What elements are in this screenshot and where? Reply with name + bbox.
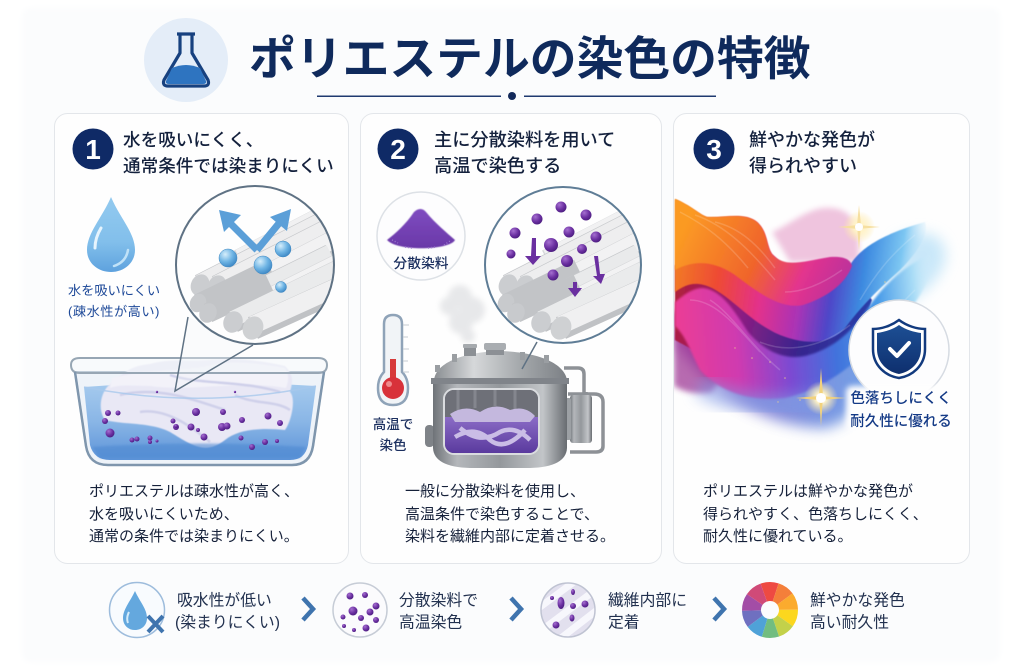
panel: card 1: [54, 114, 360, 564]
card 3 heading: 鮮やかな発色が: [749, 129, 875, 150]
flow strip: summary: [108, 582, 904, 638]
card 1 heading: 水を吸いにくく、: [123, 130, 263, 150]
number badge 2: [378, 128, 418, 170]
card 2 heading: 高温で染色する: [434, 156, 561, 176]
magnifier: dye enters fibers: [484, 186, 642, 344]
icon: thermometer: [378, 315, 409, 405]
sparkle top: [838, 205, 880, 250]
number badge 3: 3: [706, 134, 722, 165]
sparkle bottom: [796, 368, 846, 426]
magnifier: fibers repel water: [175, 185, 335, 345]
high temperature label: 高温で: [373, 416, 413, 432]
callout wedge: [175, 317, 253, 391]
pressure vessel: [425, 343, 603, 468]
title: ポリエステルの染色の特徴: [249, 33, 811, 85]
flow text 4: 高い耐久性: [810, 614, 889, 632]
disperse dye powder callout: 分散染料: [393, 256, 449, 271]
icon: water drop: [87, 197, 135, 272]
flow text 2: 高温染色: [399, 614, 462, 632]
icon: flask: [144, 18, 228, 102]
flow icon: disperse dye: [333, 583, 387, 637]
durability label: 色落ちしにくく: [850, 389, 952, 407]
disperse dye powder callout: [377, 192, 465, 280]
card 3 body text: ポリエステルは鮮やかな発色が: [703, 483, 913, 500]
card 2 body text: 高温条件で染色することで、: [405, 506, 599, 523]
steam: [440, 285, 485, 343]
durability badge: [849, 300, 949, 400]
dye arrows: [525, 238, 605, 297]
panel: card 2: [360, 114, 668, 564]
flow text 4: 鮮やかな発色: [810, 592, 905, 610]
callout pointer: [522, 342, 537, 369]
flow icon: fixed in fiber: [540, 582, 596, 638]
flow text 3: 定着: [608, 614, 640, 632]
water label: (疎水性が高い): [68, 303, 160, 319]
flow arrow 1: [303, 598, 313, 620]
number badge 1: 1: [85, 134, 101, 165]
dye particles: [506, 202, 602, 280]
icon: shield check: [873, 320, 925, 378]
title divider: [317, 92, 716, 100]
colorful dyed fabric: [674, 199, 946, 428]
flow text 1: (染まりにくい): [175, 614, 280, 632]
card 3 body text: 得られやすく、色落ちしにくく、: [703, 506, 928, 523]
high temperature label: 染色: [380, 437, 406, 453]
card 1 body text: 水を吸いにくいため、: [89, 506, 239, 523]
number badge 1: [72, 128, 114, 170]
water label: 水を吸いにくい: [68, 283, 160, 298]
water droplets: [219, 241, 291, 292]
card 2 heading: 主に分散染料を用いて: [434, 130, 615, 150]
flow icon: low absorbency: [110, 582, 164, 638]
flow icon: color wheel: [747, 587, 793, 633]
flow text 1: 吸水性が低い: [177, 592, 272, 610]
durability label: 耐久性に優れる: [850, 413, 952, 430]
card 1 heading: 通常条件では染まりにくい: [123, 156, 334, 176]
number badge 2: 2: [390, 134, 406, 165]
flow arrow 2: [511, 598, 521, 620]
arrows: water repelled: [219, 209, 291, 250]
panel: card 3: [674, 114, 970, 564]
flow text 3: 繊維内部に: [608, 592, 687, 610]
number badge 3: [694, 128, 734, 170]
card 3 body text: 耐久性に優れている。: [703, 528, 853, 545]
card 1 body text: ポリエステルは疎水性が高く、: [89, 483, 299, 500]
card 1 body text: 通常の条件では染まりにくい。: [89, 528, 299, 545]
flow text 2: 分散染料で: [399, 592, 478, 610]
tub with cloth and dye: [71, 358, 327, 465]
durability label: [846, 386, 960, 430]
card 2 body text: 一般に分散染料を使用し、: [405, 483, 585, 500]
flow arrow 3: [714, 598, 724, 620]
card 3 heading: 得られやすい: [749, 156, 857, 176]
card 2 body text: 染料を繊維内部に定着させる。: [405, 528, 615, 545]
